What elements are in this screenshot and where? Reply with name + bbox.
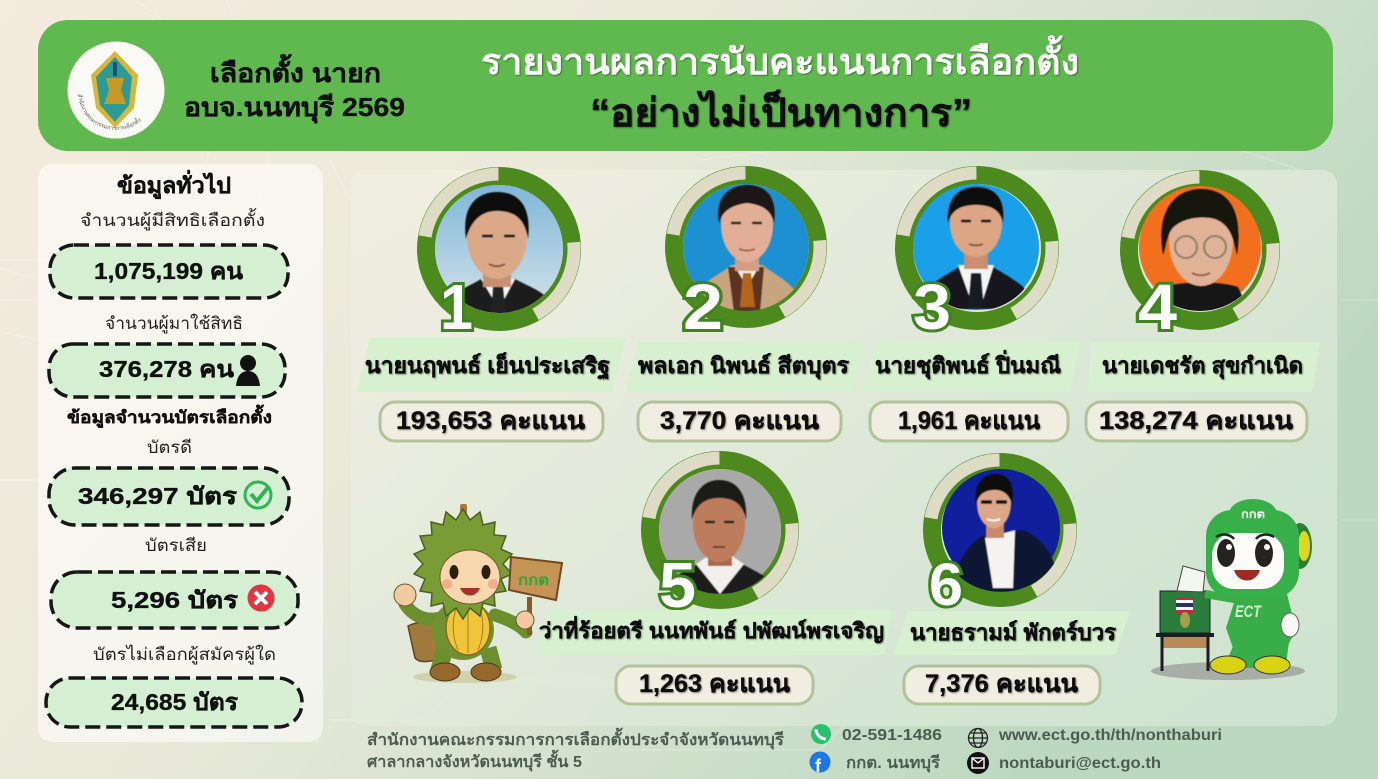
icon: phone bbox=[811, 724, 831, 744]
name band 1 bbox=[357, 338, 626, 392]
score 5 bbox=[616, 666, 813, 704]
logo: election commission seal bbox=[68, 42, 164, 138]
eligible voters: 1,075,199 คน bbox=[94, 258, 243, 284]
robot logo text bbox=[1235, 509, 1265, 621]
heading: election name: อบจ.นนทบุรี 2569 bbox=[184, 92, 405, 124]
heading: general information: ข้อมูลทั่วไป bbox=[117, 169, 231, 200]
footer: address: ศาลากลางจังหวัดนนทบุรี ชั้น 5 bbox=[367, 749, 582, 772]
facebook name: กกต. นนทบุรี bbox=[846, 753, 940, 773]
score 3: 1,961 คะแนน bbox=[898, 407, 1040, 435]
panel: general information bbox=[38, 164, 323, 742]
robot logo text: ECT bbox=[1235, 602, 1262, 621]
portrait ring 2 bbox=[672, 173, 820, 321]
title: รายงานผลการนับคะแนนการเลือกตั้ง bbox=[481, 35, 1079, 82]
eligible voters bbox=[50, 208, 288, 298]
score 1: 193,653 คะแนน bbox=[396, 407, 585, 435]
voters turnout: 376,278 คน bbox=[99, 356, 234, 382]
icon: person bbox=[236, 355, 260, 386]
number 5: 5 bbox=[659, 549, 696, 621]
icon: facebook: f bbox=[815, 756, 822, 776]
score 6 bbox=[904, 666, 1100, 704]
no-vote ballots: 24,685 บัตร bbox=[111, 689, 239, 715]
number 1: 1 bbox=[440, 271, 473, 343]
eligible voters: จำนวนผู้มีสิทธิเลือกตั้ง bbox=[80, 208, 265, 231]
icon: cross bbox=[248, 584, 274, 612]
score 5: 1,263 คะแนน bbox=[639, 670, 790, 698]
score 2 bbox=[638, 402, 841, 441]
email: nontaburi@ect.go.th bbox=[999, 755, 1161, 772]
portrait ring 6 bbox=[930, 460, 1070, 600]
ballot box and table bbox=[1156, 566, 1214, 671]
portrait ring 1 bbox=[424, 174, 574, 324]
candidate 2 bbox=[625, 173, 865, 441]
portrait ring 4 bbox=[1127, 177, 1273, 323]
mascot: ECT robot with ballot box bbox=[1151, 499, 1312, 680]
heading: election name bbox=[184, 53, 405, 124]
footer: contacts bbox=[810, 724, 1222, 776]
title bbox=[481, 35, 1079, 135]
sign: กกต bbox=[518, 572, 549, 589]
candidate 5 bbox=[535, 458, 892, 704]
score 6: 7,376 คะแนน bbox=[925, 670, 1078, 698]
website: www.ect.go.th/th/nonthaburi bbox=[998, 727, 1222, 744]
name band 6 bbox=[894, 611, 1130, 655]
candidate 4 bbox=[1086, 177, 1320, 441]
candidate 3 bbox=[862, 173, 1080, 441]
logo: election commission seal: สำนักงานคณะกรรมการการเลือกตั้ง bbox=[78, 94, 141, 130]
name band 5: ว่าที่ร้อยตรี นนทพันธ์ ปพัฒน์พรเจริญ bbox=[539, 615, 884, 644]
name band 6: นายธรามม์ พักตร์บวร bbox=[910, 620, 1116, 645]
mascot: durian character bbox=[394, 504, 562, 683]
name band 3 bbox=[862, 342, 1080, 392]
portrait ring 5 bbox=[648, 458, 792, 602]
sign bbox=[509, 557, 562, 600]
score 3 bbox=[870, 402, 1068, 441]
name band 5 bbox=[535, 610, 892, 655]
spoiled ballots: บัตรเสีย bbox=[145, 536, 207, 555]
footer: address bbox=[367, 727, 784, 772]
robot logo text: กกต bbox=[1241, 509, 1265, 521]
icon: check bbox=[245, 482, 271, 508]
name band 1: นายนฤพนธ์ เย็นประเสริฐ bbox=[365, 351, 610, 380]
score 4 bbox=[1086, 402, 1307, 441]
name band 2: พลเอก นิพนธ์ สีตบุตร bbox=[638, 353, 849, 380]
no-vote ballots bbox=[46, 644, 302, 727]
footer: address: สำนักงานคณะกรรมการการเลือกตั้งประจำจังหวัดนนทบุรี bbox=[367, 727, 784, 750]
good ballots bbox=[49, 438, 289, 525]
number 2: 2 bbox=[683, 271, 723, 343]
good ballots: บัตรดี bbox=[147, 438, 192, 457]
heading: election name: เลือกตั้ง นายก bbox=[210, 53, 381, 88]
good ballots: 346,297 บัตร bbox=[78, 483, 238, 509]
icon: globe bbox=[968, 728, 988, 748]
panel: candidates bbox=[351, 170, 1337, 726]
number 6: 6 bbox=[929, 551, 963, 618]
score 2: 3,770 คะแนน bbox=[660, 407, 819, 435]
name band 3: นายชุติพนธ์ ปิ่นมณี bbox=[875, 349, 1061, 380]
heading: ballot information: ข้อมูลจำนวนบัตรเลือกตั้ง bbox=[67, 404, 272, 429]
candidate 1 bbox=[357, 174, 626, 441]
header banner bbox=[38, 20, 1333, 151]
phone number: 02-591-1486 bbox=[842, 727, 942, 744]
name band 4 bbox=[1088, 342, 1320, 392]
voters turnout bbox=[49, 313, 285, 397]
icon: facebook bbox=[810, 752, 830, 776]
spoiled ballots: 5,296 บัตร bbox=[111, 587, 239, 613]
voters turnout: จำนวนผู้มาใช้สิทธิ bbox=[105, 313, 243, 334]
score 4: 138,274 คะแนน bbox=[1099, 407, 1293, 435]
title: “อย่างไม่เป็นทางการ” bbox=[590, 89, 972, 135]
no-vote ballots: บัตรไม่เลือกผู้สมัครผู้ใด bbox=[93, 644, 276, 665]
candidate 6 bbox=[894, 460, 1130, 704]
number 4: 4 bbox=[1138, 271, 1177, 343]
number 3: 3 bbox=[913, 271, 951, 343]
name band 2 bbox=[625, 342, 865, 392]
portrait ring 3 bbox=[902, 173, 1052, 323]
score 1 bbox=[380, 402, 603, 441]
icon: mail bbox=[967, 752, 989, 774]
name band 4: นายเดชรัต สุขกำเนิด bbox=[1102, 353, 1303, 380]
spoiled ballots bbox=[51, 536, 298, 628]
